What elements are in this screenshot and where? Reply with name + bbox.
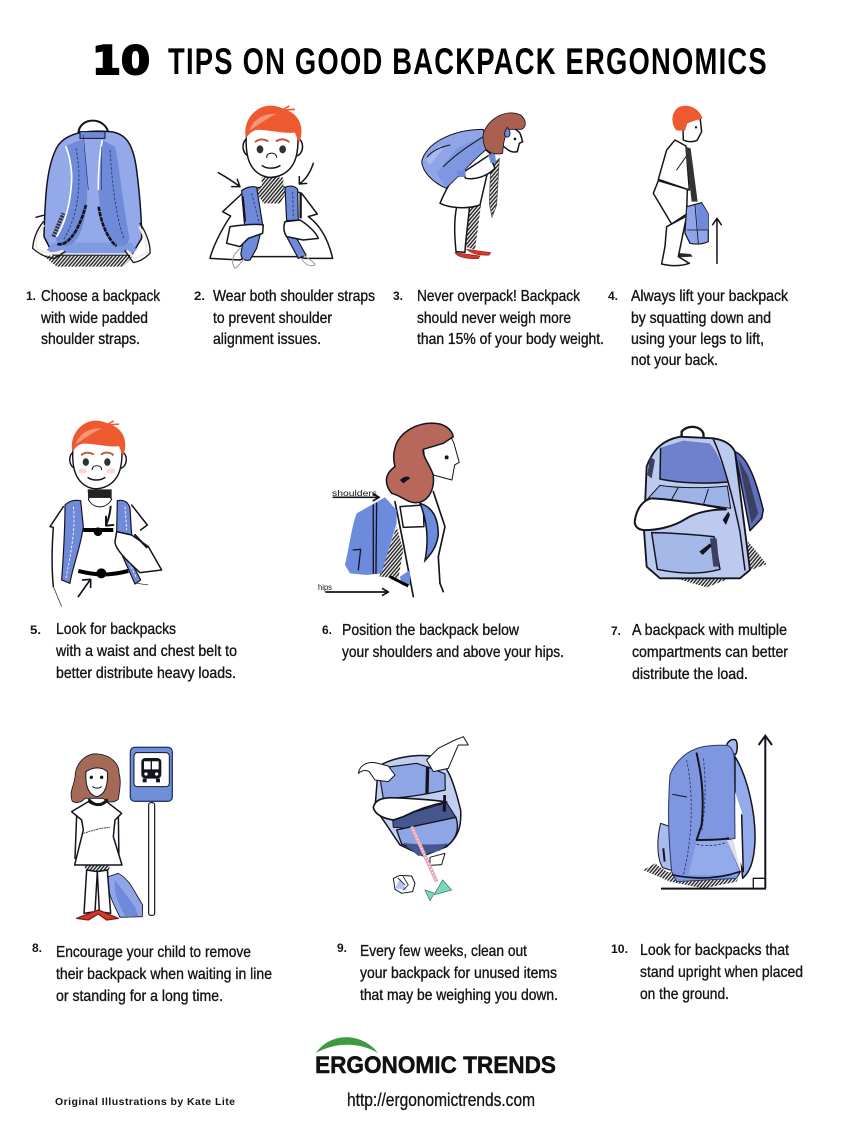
tip 10 number: 10.	[611, 942, 628, 956]
illustration: girl bent over under heavy backpack	[422, 113, 525, 259]
tip 1 text: Choose a backpack	[41, 288, 161, 305]
tip 2 text: alignment issues.	[213, 331, 321, 348]
tip 2 text: Wear both shoulder straps	[213, 288, 375, 305]
tip 8 number: 8.	[32, 941, 42, 955]
arms and dress	[75, 815, 119, 862]
tip 9 text: your backpack for unused items	[360, 965, 557, 982]
tip 7 number: 7.	[611, 624, 621, 638]
tip 4 text: using your legs to lift,	[631, 331, 764, 348]
tip 10 text: stand upright when placed	[640, 964, 803, 981]
illustration: boy with chest and waist belts	[50, 421, 162, 607]
illustration: hands emptying backpack	[358, 737, 468, 901]
panel: tip 8	[32, 747, 272, 1005]
backpack on ground	[108, 873, 143, 917]
icon: green arc	[316, 1037, 378, 1053]
shoulder straps	[241, 187, 263, 260]
tip 4 text: Always lift your backpack	[631, 288, 789, 305]
tip 10 text: Look for backpacks that	[640, 942, 789, 959]
tip 7 text: compartments can better	[632, 644, 789, 661]
tip 6 text: Position the backpack below	[342, 622, 519, 639]
tip 3 text: than 15% of your body weight.	[417, 331, 604, 348]
shoulders label and arrow	[333, 494, 379, 501]
hips arrow	[326, 589, 388, 595]
logo: Ergonomic Trends	[315, 1037, 556, 1079]
panel: tip 7	[611, 427, 789, 683]
crumpled paper	[393, 875, 415, 893]
bus stop sign	[130, 747, 172, 915]
tip 8 text: or standing for a long time.	[56, 988, 223, 1005]
tip 9 text: Every few weeks, clean out	[360, 943, 527, 960]
illustration: open backpack with compartments	[635, 427, 767, 587]
tip 1 number: 1.	[26, 289, 36, 303]
tip 5 text: with a waist and chest belt to	[55, 643, 237, 660]
tip 8 text	[56, 944, 272, 1005]
tip 9 text: that may be weighing you down.	[360, 987, 558, 1004]
panel: tip 3	[393, 113, 604, 348]
title text: TIPS ON GOOD BACKPACK ERGONOMICS	[168, 41, 767, 82]
shoes	[77, 910, 118, 920]
tip 4 text	[631, 288, 789, 369]
tip 5 text	[55, 621, 237, 682]
website url: http://ergonomictrends.com	[347, 1090, 535, 1110]
tip 1 text	[40, 288, 161, 348]
tip 2 number: 2.	[194, 289, 205, 303]
hands	[227, 224, 263, 247]
tip 8 text: their backpack when waiting in line	[56, 966, 272, 983]
hair	[71, 754, 120, 803]
panel: tip 1	[26, 121, 161, 348]
label: hips: hips	[318, 582, 332, 592]
logo wordmark: ERGONOMIC TRENDS	[315, 1052, 556, 1079]
illustration: upright backpack with right angle	[643, 736, 772, 889]
arrows	[218, 173, 240, 187]
hand	[115, 532, 162, 573]
tip 3 text: Never overpack! Backpack	[417, 288, 581, 305]
tip 4 number: 4.	[608, 289, 618, 303]
tip 3 text: should never weigh more	[417, 310, 571, 327]
panel: tip 9	[337, 737, 558, 1004]
tip 3 text	[417, 288, 604, 348]
tip 10 text: on the ground.	[640, 986, 729, 1003]
shirt and arms	[210, 187, 333, 260]
tip 1 text: shoulder straps.	[41, 331, 140, 348]
tip 3 number: 3.	[393, 289, 403, 303]
illustration: girl with backpack on ground at bus stop	[71, 747, 172, 920]
tip 5 text: better distribute heavy loads.	[56, 665, 236, 682]
panel: tip 10	[611, 736, 803, 1003]
tip 5 number: 5.	[30, 623, 41, 637]
hands	[358, 762, 395, 782]
tip 6 text: your shoulders and above your hips.	[342, 644, 564, 661]
candy wrapper	[425, 880, 452, 901]
title	[92, 39, 767, 84]
arrows	[106, 507, 113, 526]
tip 2 text	[213, 288, 375, 348]
tip 10 text	[640, 942, 803, 1003]
tip 7 text: A backpack with multiple	[632, 622, 787, 639]
belts	[83, 524, 113, 536]
tip 9 number: 9.	[337, 941, 347, 955]
legs	[84, 865, 110, 873]
panel: tip 6	[318, 423, 564, 661]
tip 4 text: by squatting down and	[631, 310, 771, 327]
tip 2 text: to prevent shoulder	[213, 310, 333, 327]
tip 7 text: distribute the load.	[632, 666, 748, 683]
tip 9 text	[360, 943, 558, 1004]
tip 6 text	[342, 622, 564, 661]
illustration: backpack rear with padded straps	[33, 121, 150, 267]
tip 7 text	[632, 622, 789, 683]
title number 10: 10	[92, 39, 150, 84]
panel: tip 2	[194, 106, 375, 348]
tip 1 text: with wide padded	[40, 310, 148, 327]
label: shoulders: shoulders	[332, 488, 377, 498]
panel: tip 4	[608, 106, 789, 369]
tip 6 number: 6.	[322, 623, 332, 637]
tip 4 text: not your back.	[631, 352, 718, 369]
tip 5 text: Look for backpacks	[56, 621, 176, 638]
illustration: boy squatting to lift backpack	[653, 106, 721, 266]
panel: tip 5	[30, 421, 237, 682]
credit: Original Illustrations by Kate Lite	[55, 1096, 235, 1108]
illustration: girl from side with backpack position	[326, 423, 459, 597]
illustration: boy wearing both shoulder straps	[210, 106, 333, 268]
tip 8 text: Encourage your child to remove	[56, 944, 251, 961]
straps	[62, 500, 83, 583]
